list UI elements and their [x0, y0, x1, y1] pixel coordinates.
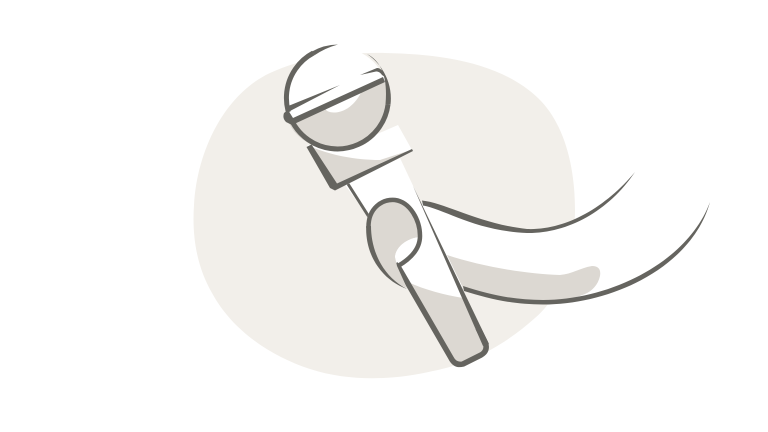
handle body — [345, 158, 487, 365]
cable — [395, 172, 710, 304]
loop inner cutout — [395, 237, 420, 265]
cable shadow — [447, 255, 600, 302]
head band — [283, 68, 385, 125]
cable top line — [422, 172, 635, 233]
loop outline — [368, 200, 420, 266]
band white strip — [289, 72, 383, 122]
band lower line — [283, 77, 385, 125]
handle right edge — [413, 186, 489, 346]
cable ribbon fill — [395, 172, 710, 302]
handle lower shading — [408, 282, 487, 365]
head white dome — [286, 47, 388, 149]
head highlight — [326, 91, 362, 112]
head grey lower half — [289, 80, 388, 150]
head outline taper top — [312, 44, 338, 55]
collar outline — [306, 144, 413, 190]
collar fill — [307, 125, 412, 188]
loop fill — [367, 199, 420, 288]
head outline — [286, 53, 388, 149]
cable loop around handle — [366, 199, 420, 289]
microphone — [283, 44, 489, 365]
handle bottom outline — [396, 263, 486, 364]
microphone head — [283, 44, 391, 150]
handle left edge — [348, 184, 369, 217]
head outline taper right — [367, 54, 391, 105]
background blob — [194, 53, 575, 378]
loop lower taper — [366, 226, 407, 289]
cable bottom line — [463, 202, 710, 304]
collar — [306, 125, 413, 190]
band upper line — [287, 85, 340, 111]
